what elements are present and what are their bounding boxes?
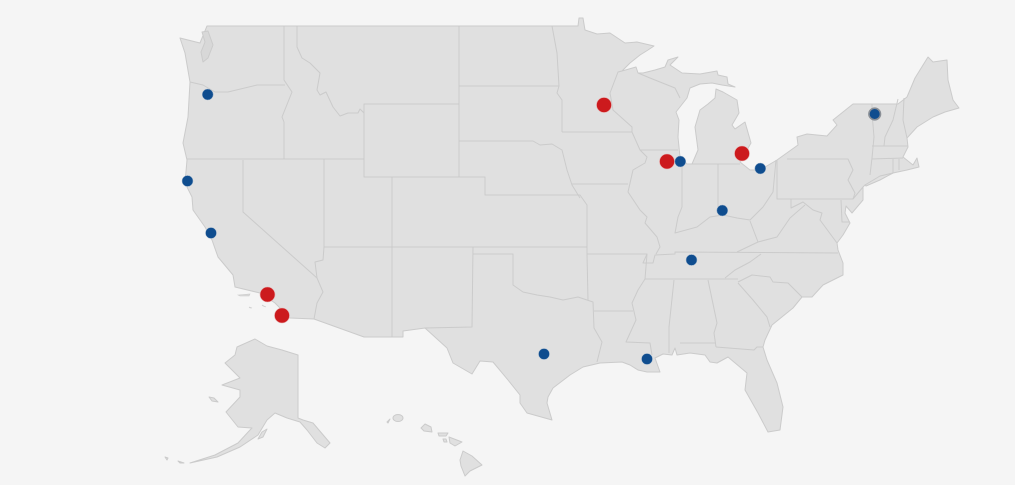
blue marker with halo: [869, 108, 880, 120]
Alaska: [165, 339, 330, 463]
blue markers: [182, 89, 766, 364]
California channel islands: [238, 294, 266, 308]
state borders: [187, 26, 908, 362]
Hawaii: [387, 414, 482, 476]
red markers: [260, 98, 750, 323]
contiguous states: [180, 18, 959, 432]
